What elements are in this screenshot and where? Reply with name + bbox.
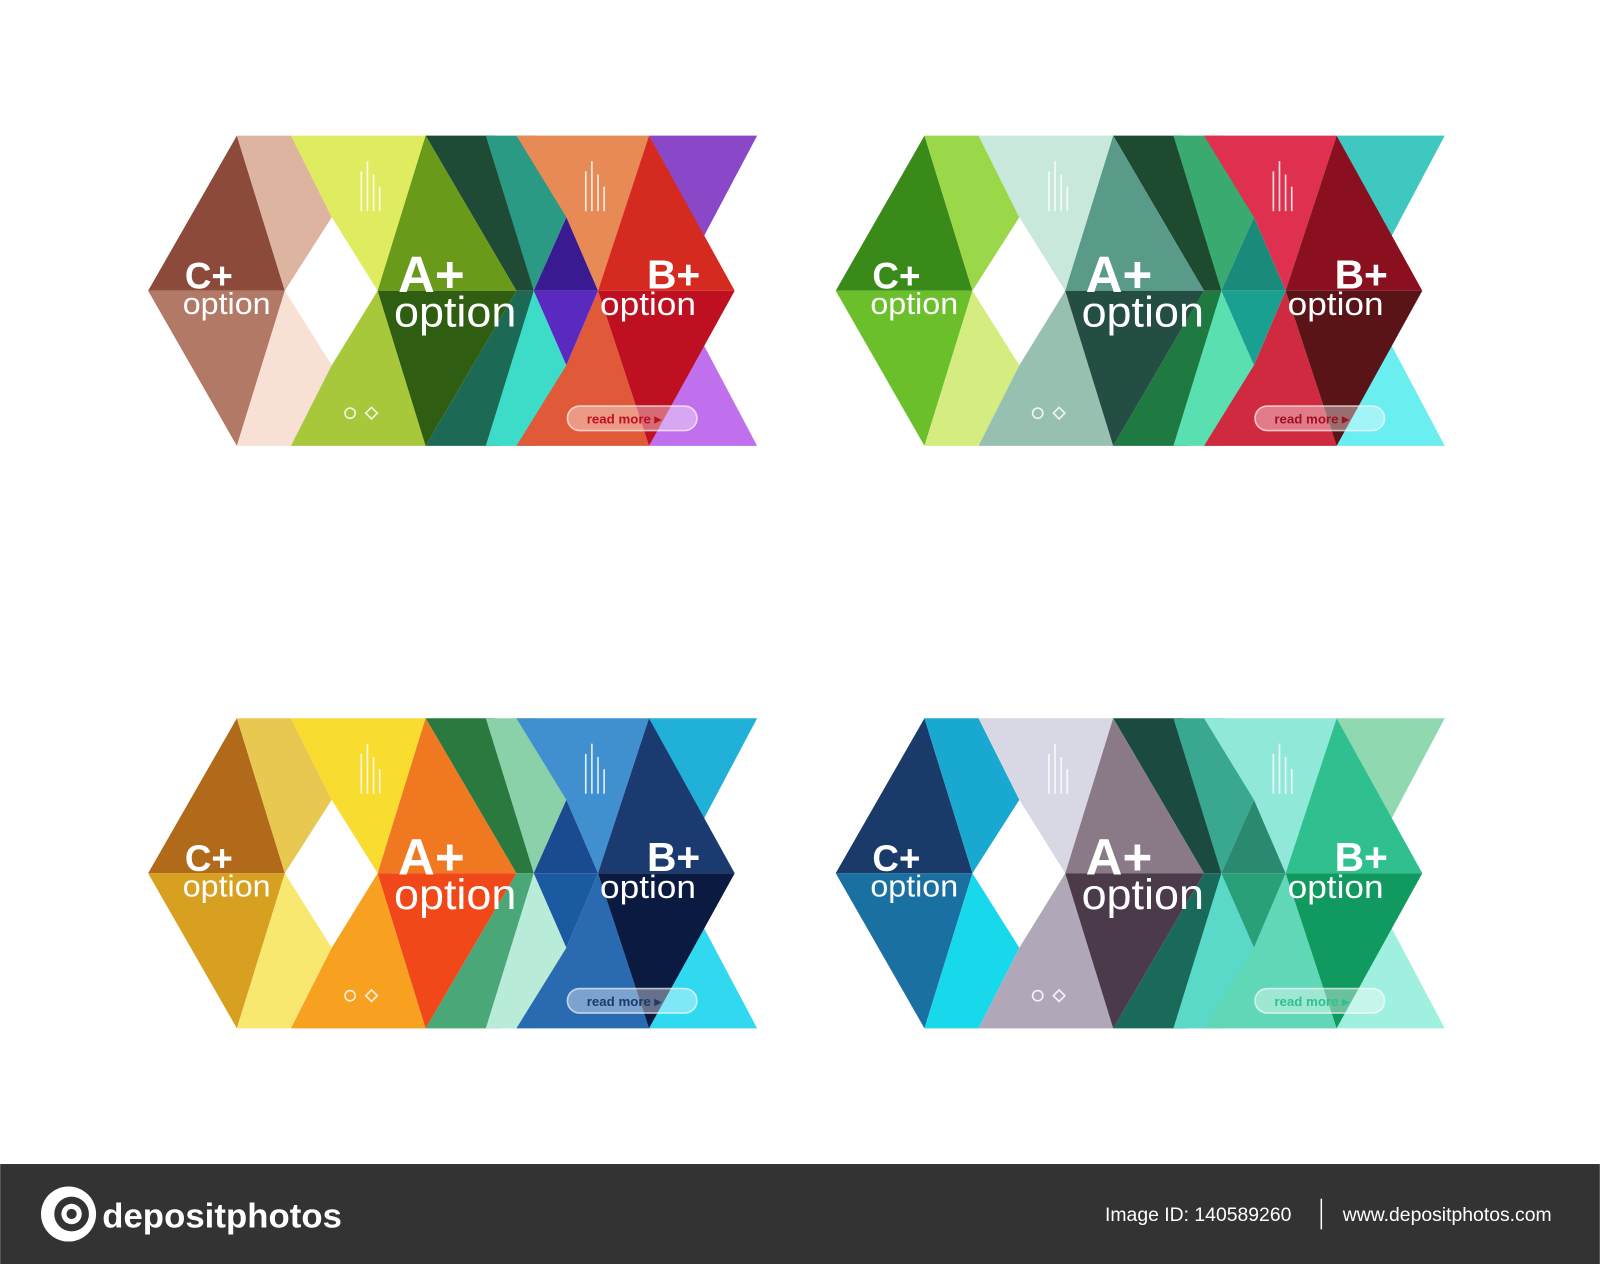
label B+: B+ [647, 252, 700, 298]
button: read more: read more ▸ [587, 994, 663, 1009]
label B+ [600, 252, 700, 322]
label C+: C+ [872, 256, 920, 297]
panel: top-left infographic [148, 136, 757, 446]
label A+ [394, 246, 516, 336]
label C+ [870, 256, 958, 321]
label B+: B+ [1335, 834, 1388, 880]
label A+: option [1082, 871, 1204, 919]
label A+: A+ [398, 246, 465, 303]
label C+: C+ [185, 838, 233, 879]
image id: Image ID: 140589260 [1105, 1204, 1292, 1226]
label B+: option [1288, 285, 1384, 322]
label C+: option [870, 870, 958, 904]
label C+: option [183, 870, 271, 904]
label C+: option [183, 287, 271, 321]
icon: camera logo [41, 1186, 96, 1242]
button: read more: read more ▸ [1274, 411, 1350, 426]
label C+ [183, 838, 271, 904]
website: www.depositphotos.com [1342, 1204, 1552, 1226]
label C+: option [870, 287, 958, 321]
label A+ [1082, 828, 1204, 919]
label C+ [870, 838, 958, 904]
label B+ [1288, 834, 1388, 905]
label A+: option [394, 288, 516, 336]
label A+: option [1082, 288, 1204, 336]
label B+: option [600, 285, 696, 322]
label C+ [183, 256, 271, 321]
button: read more: read more ▸ [587, 411, 663, 426]
label B+: B+ [1335, 252, 1388, 298]
panel: bottom-right infographic [836, 718, 1445, 1028]
label B+: B+ [647, 834, 700, 880]
label A+: option [394, 871, 516, 919]
panel: bottom-left infographic [148, 718, 757, 1028]
label B+ [1288, 252, 1388, 322]
logo text: depositphotos [102, 1197, 342, 1235]
label C+: C+ [872, 838, 920, 879]
panel: top-right infographic [836, 136, 1445, 446]
label B+ [600, 834, 700, 905]
footer bar [0, 1164, 1600, 1264]
label B+: option [1288, 868, 1384, 905]
label A+: A+ [1086, 828, 1152, 885]
label A+: A+ [398, 828, 465, 885]
label A+ [394, 828, 516, 919]
label A+ [1082, 246, 1204, 336]
label C+: C+ [185, 256, 233, 297]
label A+: A+ [1086, 246, 1152, 303]
button: read more: read more ▸ [1274, 994, 1350, 1009]
label B+: option [600, 868, 696, 905]
